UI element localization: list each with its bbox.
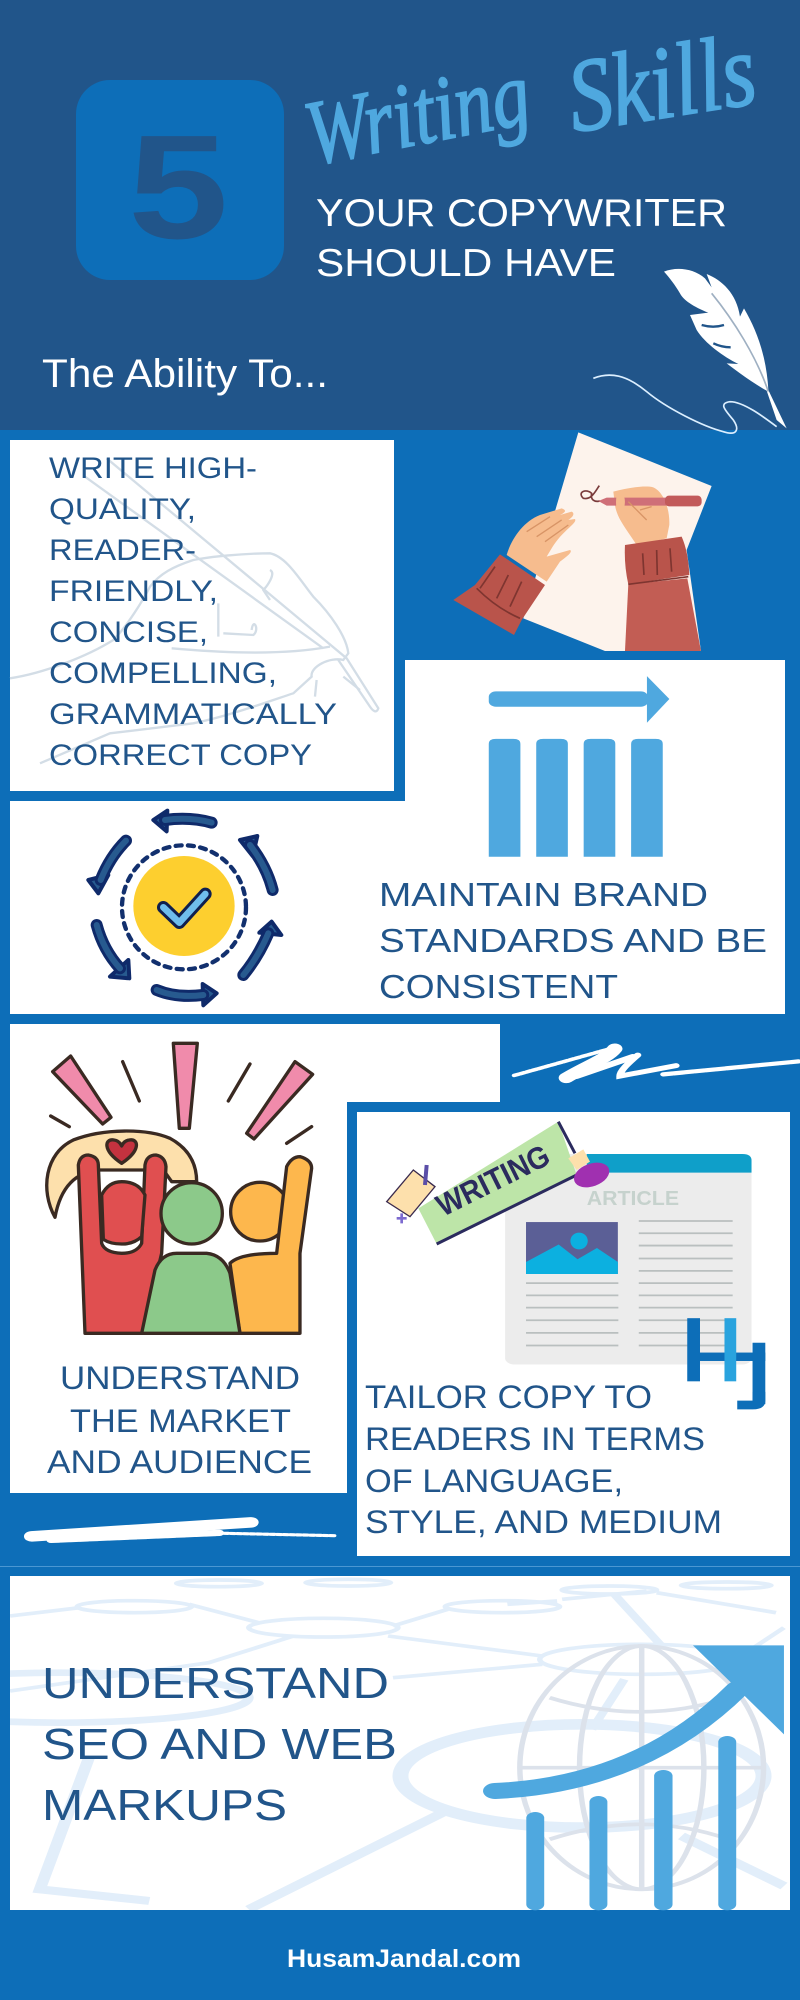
icon: number 5 badge — [76, 80, 284, 280]
icon: arrow over bars — [489, 676, 669, 857]
panel: understand SEO — [0, 1576, 790, 1910]
title: Writing Skills — [296, 12, 763, 185]
text: understand the market — [47, 1360, 312, 1480]
title: Writing Skills: Skills — [560, 12, 763, 155]
text: tailor copy: TAILOR COPY TO — [365, 1379, 652, 1415]
text: understand SEO: UNDERSTAND — [42, 1659, 389, 1708]
icon: cheering audience — [47, 1043, 313, 1333]
text: write copy: FRIENDLY, — [49, 575, 218, 608]
icon: globe — [520, 1646, 764, 1889]
text: tailor copy: READERS IN TERMS — [365, 1421, 705, 1457]
text: understand SEO — [42, 1659, 397, 1830]
text: maintain brand standards: CONSISTENT — [379, 968, 618, 1005]
illustration: hands writing on paper — [453, 432, 712, 651]
text: maintain brand standards — [379, 876, 767, 1005]
panel: tailor copy — [347, 1102, 800, 1566]
text: tailor copy — [365, 1379, 722, 1540]
text: write copy — [49, 452, 337, 772]
text: tailor copy: OF LANGUAGE, — [365, 1463, 623, 1499]
text: understand the market: UNDERSTAND — [60, 1360, 300, 1396]
chalk stroke: top right — [514, 1047, 798, 1078]
text: write copy: WRITE HIGH- — [49, 452, 257, 485]
header panel — [0, 0, 800, 433]
icon: growth chart with arrow — [495, 1645, 784, 1910]
text: write copy: GRAMMATICALLY — [49, 698, 337, 731]
text: understand SEO: MARKUPS — [42, 1781, 287, 1830]
icon: feather quill — [593, 269, 787, 433]
illustration: writing sign: WRITING — [431, 1138, 555, 1223]
panel: write high-quality copy — [10, 440, 394, 791]
text: understand SEO: SEO AND WEB — [42, 1720, 397, 1769]
subtitle: YOUR COPYWRITER — [316, 192, 727, 235]
subtitle: SHOULD HAVE — [316, 242, 616, 285]
illustration: writing sign — [387, 1122, 613, 1244]
text: The Ability To...: The Ability To... — [42, 352, 328, 396]
title: Writing Skills: Writing — [296, 41, 538, 185]
text: write copy: COMPELLING, — [49, 657, 277, 690]
illustration: article page: ARTICLE — [587, 1188, 679, 1210]
network background — [0, 1579, 784, 1909]
icon: number 5 badge: 5 — [128, 104, 228, 269]
text: understand the market: AND AUDIENCE — [47, 1444, 312, 1480]
decorative hand sketch — [10, 458, 378, 763]
text: tailor copy: STYLE, AND MEDIUM — [365, 1504, 722, 1540]
subtitle — [316, 192, 727, 285]
chalk stroke: bottom left — [32, 1522, 334, 1540]
footer website: HusamJandal.com — [287, 1945, 521, 1973]
text: maintain brand standards: STANDARDS AND BE — [379, 922, 767, 959]
text: write copy: READER- — [49, 534, 196, 567]
text: write copy: CONCISE, — [49, 616, 208, 649]
icon: check mark with cycle arrows — [88, 811, 281, 1005]
logo: HJ monogram — [687, 1318, 765, 1409]
text: write copy: QUALITY, — [49, 493, 196, 526]
text: understand the market: THE MARKET — [70, 1403, 291, 1439]
panel: understand the market — [10, 1024, 500, 1493]
text: maintain brand standards: MAINTAIN BRAND — [379, 876, 708, 913]
divider line — [0, 1566, 800, 1567]
illustration: article page — [505, 1154, 752, 1364]
panel: maintain brand standards — [10, 660, 785, 1014]
text: write copy: CORRECT COPY — [49, 739, 312, 772]
